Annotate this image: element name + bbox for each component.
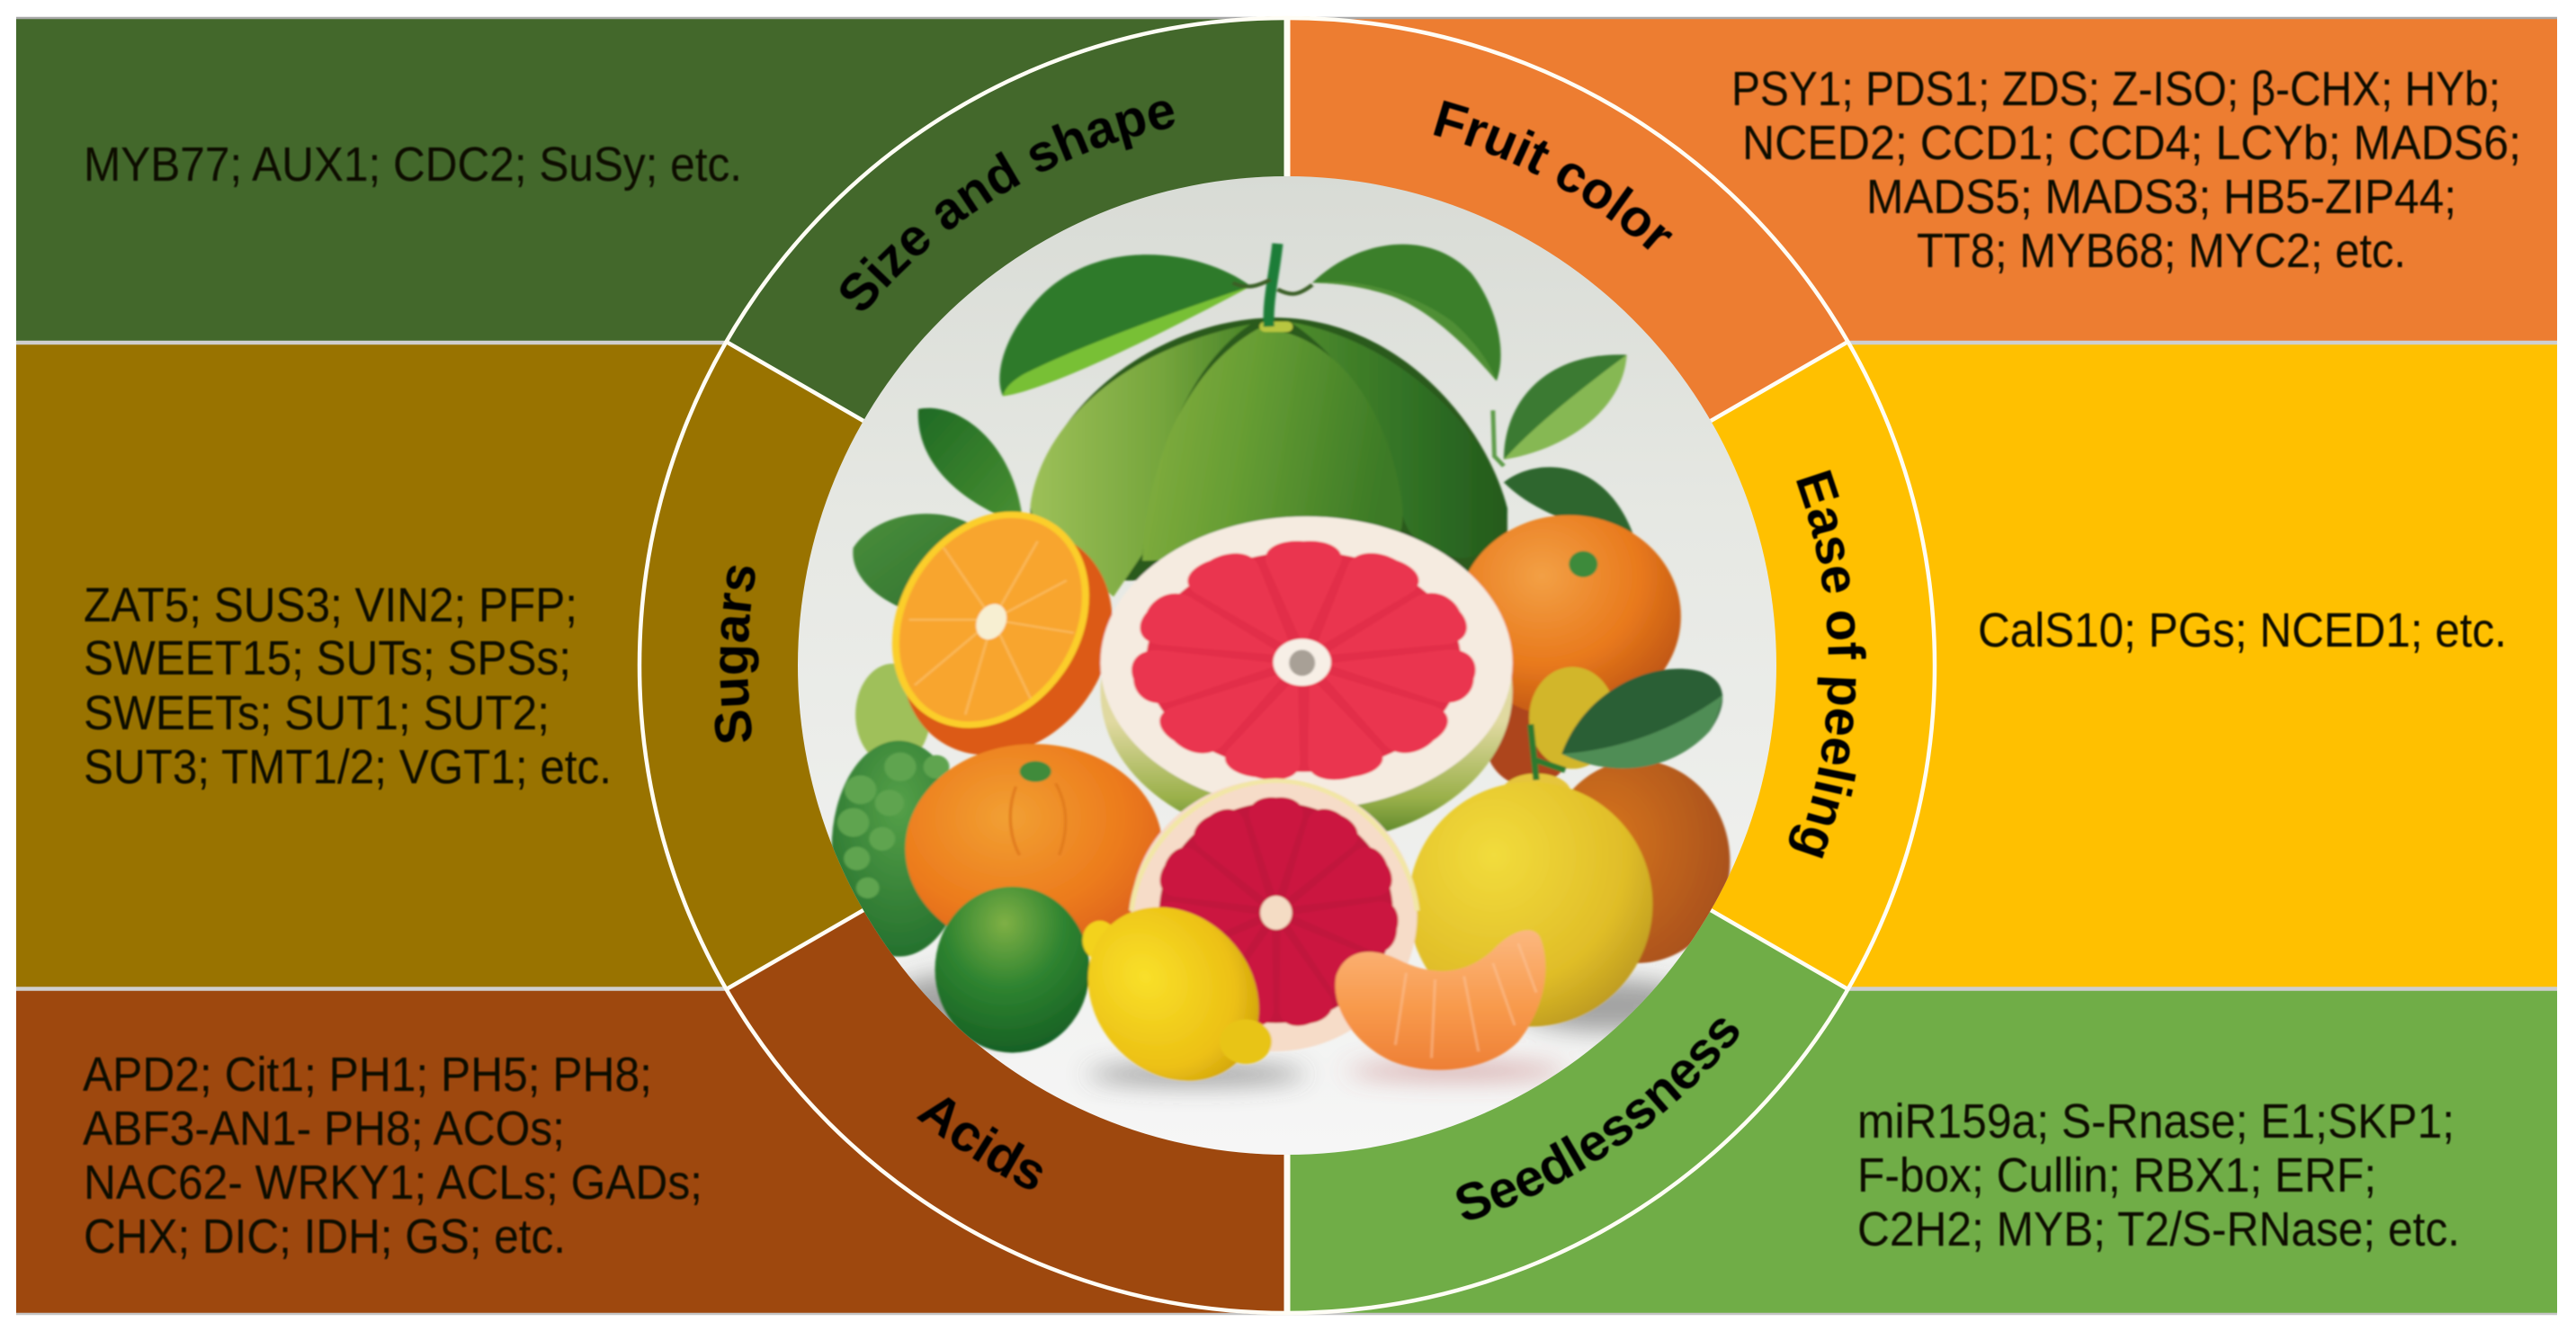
leaf and stem on lemon xyxy=(1531,669,1722,780)
label: Fruit color: Fruit color xyxy=(1433,99,1673,250)
genes: seedlessness: miR159a; S-Rnase; E1;SKP1; xyxy=(1857,1094,2455,1148)
halved orange xyxy=(890,509,1114,755)
label: Acids: Acids xyxy=(916,1097,1043,1191)
genes: fruit color: MADS5; MADS3; HB5-ZIP44; xyxy=(1866,170,2456,224)
central citrus illustration xyxy=(796,174,1778,1157)
genes: fruit color: TT8; MYB68; MYC2; etc. xyxy=(1917,224,2406,278)
label: Ease of peeling: Ease of peeling xyxy=(1788,469,1867,860)
grapefruit half: pink flesh xyxy=(1100,516,1513,844)
genes: fruit color xyxy=(1731,62,2521,278)
panel: size and shape xyxy=(16,17,1287,343)
genes: size and shape: MYB77; AUX1; CDC2; SuSy; etc. xyxy=(84,138,742,192)
shadows xyxy=(886,973,1703,1086)
leaves behind xyxy=(918,408,1024,525)
top leaves xyxy=(999,255,1251,396)
pomelo xyxy=(1031,317,1507,597)
tangerine segment xyxy=(1336,930,1545,1070)
ring: colored sectors xyxy=(638,16,1936,1315)
big lemon xyxy=(1409,773,1652,1026)
genes: acids: ABF3-AN1- PH8; ACOs; xyxy=(83,1102,565,1156)
lime xyxy=(935,887,1089,1053)
genes: seedlessness: C2H2; MYB; T2/S-RNase; etc. xyxy=(1857,1202,2460,1256)
genes: sugars: SWEET15; SUTs; SPSs; xyxy=(84,631,571,685)
genes: sugars: ZAT5; SUS3; VIN2; PFP; xyxy=(84,578,577,632)
genes: seedlessness: F-box; Cullin; RBX1; ERF; xyxy=(1857,1148,2376,1202)
panel: seedlessness xyxy=(1287,987,2557,1314)
genes: fruit color: NCED2; CCD1; CCD4; LCYb; MADS6; xyxy=(1742,116,2521,170)
panel: acids xyxy=(16,987,1287,1314)
genes: acids: APD2; Cit1; PH1; PH5; PH8; xyxy=(83,1048,652,1102)
grapefruit half: red flesh xyxy=(1131,780,1417,1051)
genes: fruit color: PSY1; PDS1; ZDS; Z-ISO; β-CHX; HYb; xyxy=(1731,62,2500,116)
panel: ease of peeling xyxy=(1287,343,2557,987)
genes: ease of peeling: CalS10; PGs; NCED1; etc. xyxy=(1978,603,2507,657)
genes: sugars: SWEETs; SUT1; SUT2; xyxy=(84,686,550,740)
orange, lower left xyxy=(906,744,1163,953)
genes: acids xyxy=(83,1048,702,1264)
genes: seedlessness xyxy=(1857,1094,2460,1256)
back orange and small citrus xyxy=(855,664,931,765)
kaffir lime xyxy=(832,741,966,957)
label: Size and shape: Size and shape xyxy=(840,101,1176,311)
label: Sugars: Sugars xyxy=(714,565,760,743)
panel: fruit color xyxy=(1287,17,2557,343)
genes: acids: CHX; DIC; IDH; GS; etc. xyxy=(84,1210,566,1264)
genes: sugars xyxy=(84,578,612,794)
genes: sugars: SUT3; TMT1/2; VGT1; etc. xyxy=(84,740,612,794)
panel: sugars xyxy=(16,343,1287,987)
genes: acids: NAC62- WRKY1; ACLs; GADs; xyxy=(84,1156,702,1210)
lemon xyxy=(1080,905,1274,1083)
ring: white separators xyxy=(640,18,1935,1313)
label: Seedlessness: Seedlessness xyxy=(1455,1018,1740,1221)
